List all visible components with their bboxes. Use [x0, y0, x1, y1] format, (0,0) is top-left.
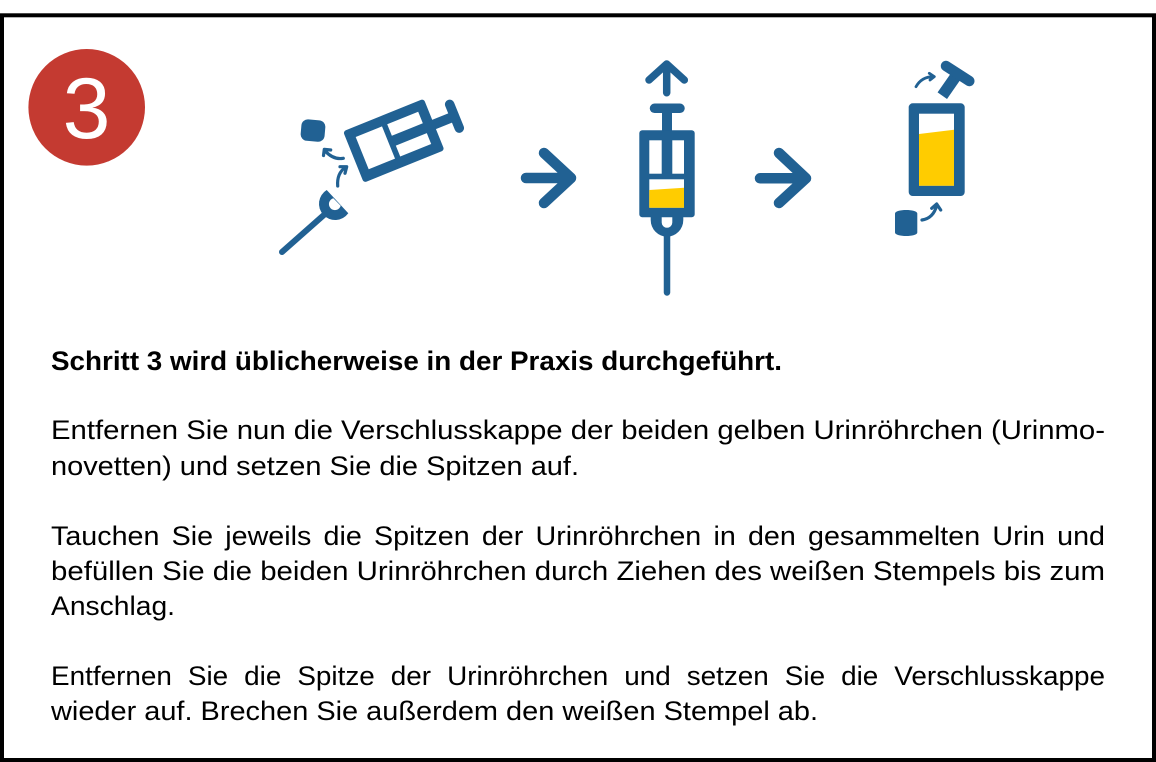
text: paragraph 3: wieder auf. Brechen Sie außerdem den weißen Stempel ab.: [50, 696, 818, 726]
arrow: first to second step: [526, 153, 571, 203]
badge: step number 3: 3: [63, 61, 110, 157]
text: paragraph 1: [51, 415, 1105, 481]
urine fill: [649, 188, 684, 208]
icon: tilted syringe with cap and tip: [282, 91, 465, 252]
urine fill: [919, 130, 954, 186]
plunger: [654, 104, 680, 113]
barrel: [639, 130, 695, 217]
up arrow: [649, 64, 684, 93]
text: paragraph 2: Tauchen Sie jeweils die Spitzen der Urinröhrchen in den gesammelten Urin und: [51, 521, 1105, 551]
cap: [895, 210, 917, 236]
small arrow to plunger: [916, 73, 934, 87]
small arrow to cap: [324, 149, 343, 159]
text: bold intro: Schritt 3 wird üblicherweise in der Praxis durchgeführt.: [51, 346, 782, 376]
needle: [664, 235, 670, 292]
small arrow to tube: [922, 204, 941, 220]
small arrow to syringe: [338, 167, 347, 186]
nozzle: [651, 217, 683, 237]
text: paragraph 2: Anschlag.: [51, 591, 175, 621]
text: paragraph 3: Entfernen Sie die Spitze der Urinröhrchen und setzen Sie die Verschlusskappe: [51, 661, 1105, 691]
text: paragraph 2: [51, 521, 1105, 621]
arrow: second to third step: [760, 153, 806, 203]
tube: [909, 103, 965, 196]
text: paragraph 1: novetten) und setzen Sie die Spitzen auf.: [51, 451, 579, 481]
broken plunger: [942, 75, 957, 96]
badge: step number 3: [28, 49, 145, 166]
removed cap: [300, 119, 326, 142]
icon: upright syringe with yellow urine: [639, 64, 695, 292]
text: paragraph 3: [50, 661, 1105, 726]
icon: filled tube with cap and plunger removed: [895, 66, 969, 236]
syringe body: [343, 91, 465, 183]
text: paragraph 2: befüllen Sie die beiden Urinröhrchen durch Ziehen des weißen Stempels bis zum: [51, 556, 1105, 586]
text: paragraph 1: Entfernen Sie nun die Verschlusskappe der beiden gelben Urinröhrchen (Urinmo-: [51, 415, 1105, 445]
needle tip: [282, 190, 348, 252]
